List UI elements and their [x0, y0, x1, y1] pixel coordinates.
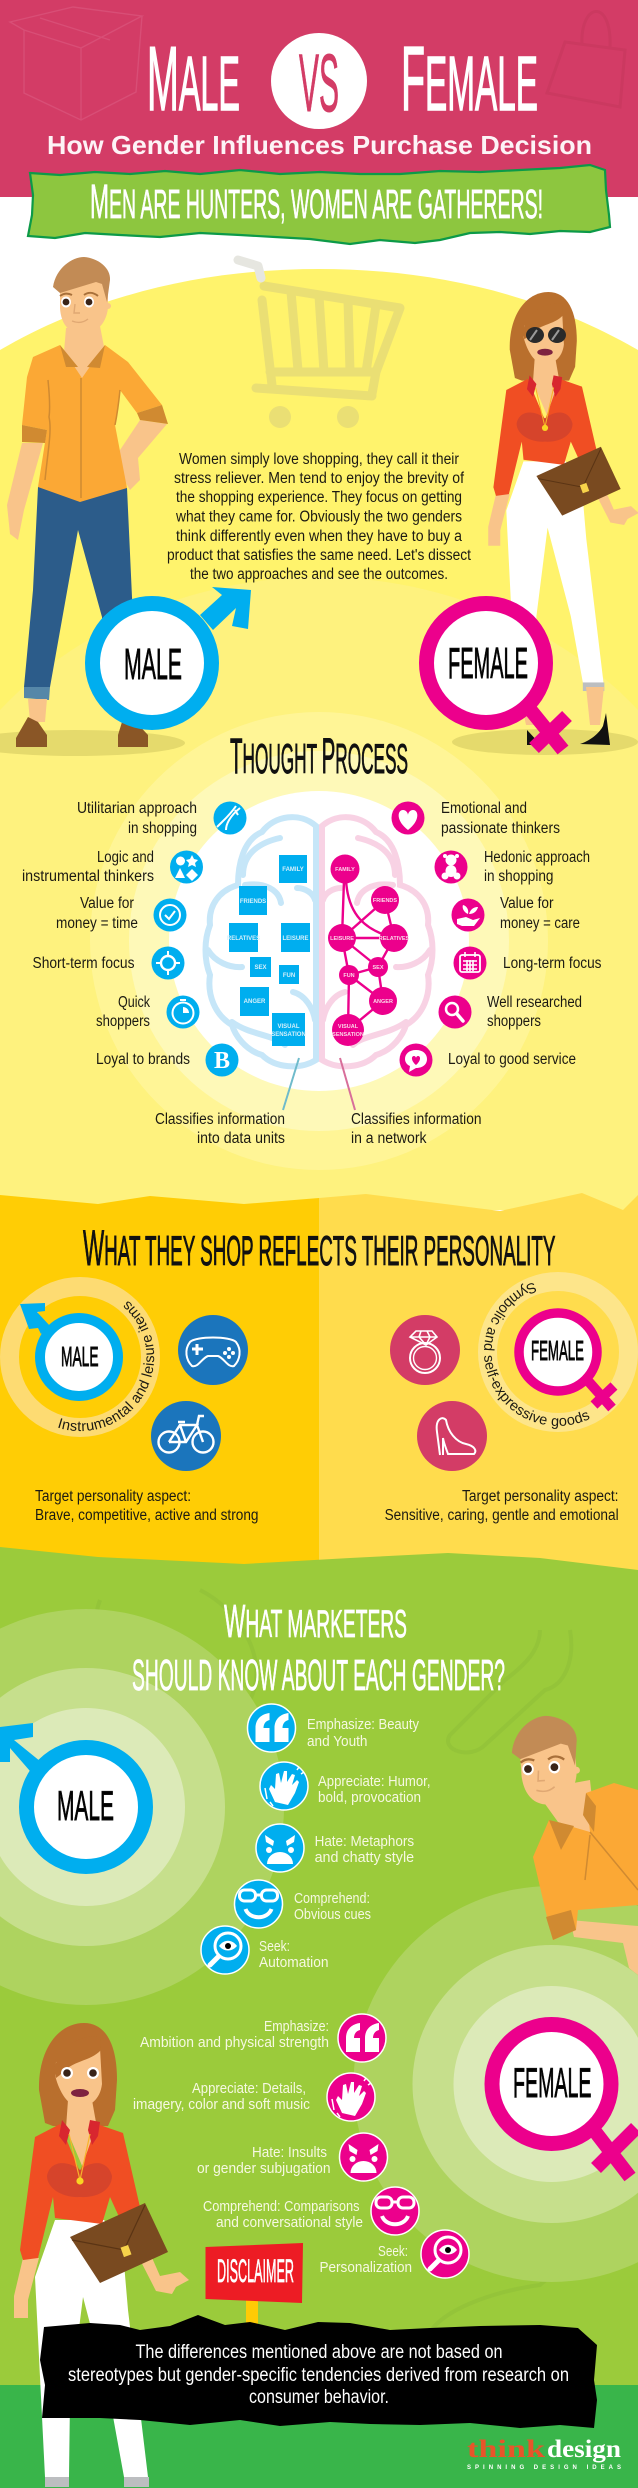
icon: bicycle — [151, 1401, 221, 1471]
tip: hate: Hate: Metaphors — [315, 1833, 414, 1850]
text block: intro paragraph: what they came for. Obviously the two genders — [175, 508, 462, 526]
panel: male concentric circles — [0, 1609, 284, 2005]
labels: male thinking traits: Short-term focus — [32, 955, 135, 972]
icon: male symbol large — [0, 1723, 146, 1866]
brain: right half outline — [322, 817, 432, 1066]
banner: disclaimer text — [40, 2315, 597, 2428]
data unit boxes: FAMILY — [282, 867, 304, 873]
text block: intro paragraph: the shopping experience. They focus on getting — [176, 489, 462, 506]
tip: seek — [320, 2230, 469, 2278]
diagram: brain — [206, 817, 432, 1110]
text block: intro paragraph — [167, 451, 472, 583]
tip: appreciate: Appreciate: Details, — [192, 2080, 306, 2097]
panel: header — [0, 0, 638, 197]
data unit boxes: RELATIVES — [227, 936, 260, 942]
panel: female shopping — [385, 1272, 638, 1524]
labels: female thinking traits: in a network — [351, 1130, 427, 1147]
labels: female thinking traits: shoppers — [487, 1013, 541, 1030]
icon: speech heart — [400, 1044, 432, 1076]
labels: female thinking traits: Emotional and — [441, 800, 527, 817]
tip: comprehend — [234, 1880, 371, 1928]
icon: female symbol large — [492, 2024, 636, 2177]
tip: seek: Personalization — [320, 2259, 412, 2276]
icon: shapes — [170, 850, 203, 884]
labels: male thinking traits: Classifies information — [155, 1111, 285, 1128]
network nodes: ANGER — [373, 999, 393, 1005]
banner: disclaimer text: stereotypes but gender-specific tendencies derived from research on — [68, 2365, 569, 2386]
text: male personality target: Target personality aspect: — [35, 1488, 191, 1505]
curved text: instrumental and leisure items: Instrumental and leisure items — [58, 1302, 154, 1432]
sign: disclaimer — [206, 2243, 303, 2334]
text block: intro paragraph: product that satisfies the same need. Let's dissect — [167, 547, 472, 564]
title: VS — [299, 38, 339, 129]
tip: comprehend — [203, 2187, 419, 2235]
lower ground — [0, 2385, 638, 2488]
tip: seek: Seek: — [378, 2243, 408, 2260]
tip: appreciate — [133, 2073, 375, 2121]
text: male personality target — [35, 1488, 258, 1524]
labels: female thinking traits: Value for — [500, 895, 554, 912]
network nodes: VISUAL — [338, 1024, 359, 1030]
subtitle: How Gender Influences Purchase Decision — [47, 130, 592, 160]
list: male marketing tips — [201, 1704, 430, 1974]
network nodes: SEX — [372, 965, 384, 971]
network nodes: FUN — [343, 973, 355, 979]
banner: disclaimer text: The differences mentioned above are not based on — [136, 2342, 502, 2363]
icon: teddy bear — [434, 850, 468, 884]
male symbol small — [20, 1303, 118, 1396]
labels: male thinking traits: Loyal to brands — [96, 1051, 190, 1068]
labels: male thinking traits: Utilitarian approach — [77, 800, 197, 817]
network nodes: FAMILY — [335, 867, 355, 873]
tip: hate: and chatty style — [315, 1849, 414, 1866]
icon: female symbol with label: FEMALE — [448, 639, 528, 688]
text block: intro paragraph: stress reliever. Men tend to enjoy the brevity of — [174, 470, 465, 487]
title — [147, 29, 538, 130]
tip: comprehend: and conversational style — [216, 2214, 363, 2231]
icon: faint box — [10, 7, 142, 120]
icon: heart — [392, 802, 424, 834]
icon: male symbol with label: MALE — [124, 640, 182, 689]
text: male personality target: Brave, competitive, active and strong — [35, 1507, 258, 1524]
tip: seek — [201, 1926, 328, 1974]
icon: magnifier — [438, 996, 472, 1028]
tip: seek: Automation — [259, 1954, 328, 1971]
tip: seek: Seek: — [259, 1938, 290, 1955]
female halo ring — [488, 1282, 628, 1422]
icon: faint shopping bag — [547, 11, 625, 107]
heading: what marketers should know — [132, 1595, 505, 1700]
labels: male thinking traits: into data units — [197, 1130, 285, 1147]
heading: thought process: THOUGHT PROCESS — [230, 728, 408, 784]
network nodes: SENSATION — [332, 1032, 364, 1038]
icon: female symbol with label — [426, 604, 567, 750]
panel: marketers background — [0, 1547, 638, 2488]
labels: male thinking traits: shoppers — [96, 1013, 150, 1030]
labels: male thinking traits — [22, 800, 285, 1147]
tip: appreciate: bold, provocation — [318, 1789, 421, 1806]
network nodes: FRIENDS — [373, 898, 397, 904]
data unit boxes: LEISURE — [282, 936, 309, 942]
illustration: man — [0, 257, 185, 756]
labels: female thinking traits: Hedonic approach — [484, 849, 590, 866]
banner: disclaimer text: consumer behavior. — [249, 2387, 389, 2408]
labels: male thinking traits: Logic and — [97, 849, 154, 866]
icon: brand letter — [206, 1044, 238, 1076]
icon: male symbol with label — [92, 587, 251, 722]
labels: female thinking traits — [351, 800, 602, 1147]
data unit boxes: SENSATION — [271, 1032, 306, 1038]
network nodes — [328, 854, 410, 1046]
tip: emphasize: and Youth — [307, 1733, 368, 1750]
brain: left half outline — [206, 817, 316, 1066]
icon: high heel — [417, 1401, 487, 1471]
heading: what marketers should know: WHAT MARKETERS — [224, 1595, 407, 1647]
icon: brand letter: B — [214, 1048, 230, 1074]
title: MALE — [147, 29, 240, 130]
callout line: female — [340, 1058, 355, 1110]
text block: intro paragraph: think differently even when they have to buy a — [176, 528, 462, 545]
female symbol small — [519, 1313, 614, 1408]
icon: hand with plant — [452, 898, 484, 932]
sunglasses — [526, 327, 566, 343]
illustration: woman with bag — [14, 2023, 189, 2487]
logo: think design: design — [547, 2436, 621, 2463]
data unit boxes: VISUAL — [277, 1024, 300, 1030]
text: female personality target: Target personality aspect: — [462, 1488, 618, 1505]
tip: emphasize — [140, 2014, 386, 2062]
banner: men are hunters — [28, 165, 610, 244]
labels: female thinking traits: Classifies information — [351, 1111, 482, 1128]
icon: target — [152, 946, 184, 980]
logo: think design: think — [467, 2436, 545, 2463]
panel: female concentric circles — [354, 1886, 638, 2282]
labels: male thinking traits: in shopping — [128, 820, 197, 837]
tip: appreciate — [260, 1762, 430, 1810]
network nodes: LEISURE — [330, 936, 354, 942]
network nodes: RELATIVES — [379, 936, 410, 942]
tip: hate: Hate: Insults — [252, 2144, 327, 2161]
text block: intro paragraph: the two approaches and see the outcomes. — [190, 566, 448, 583]
labels: female thinking traits: Well researched — [487, 994, 582, 1011]
tip: appreciate: Appreciate: Humor, — [318, 1773, 430, 1790]
panel: what they shop background — [0, 1193, 638, 1570]
icon: male symbol large: MALE — [57, 1782, 114, 1829]
illustration: woman with sunglasses — [452, 292, 638, 755]
data unit boxes: FUN — [283, 973, 295, 979]
icons: male traits — [152, 802, 246, 1076]
panel: yellow intro and thought process background — [0, 269, 638, 1210]
illustration: man leaning — [509, 1714, 638, 1975]
tip: hate — [256, 1824, 414, 1872]
icon: calendar — [454, 946, 486, 980]
logo: think design: SPINNING DESIGN IDEAS — [467, 2465, 621, 2471]
callout line: male — [283, 1058, 299, 1110]
tip: emphasize: Emphasize: — [264, 2018, 329, 2035]
labels: female thinking traits: Loyal to good service — [448, 1051, 576, 1068]
tip: emphasize — [248, 1704, 419, 1752]
tip: hate: or gender subjugation — [197, 2160, 330, 2177]
icon: ring — [390, 1315, 460, 1385]
tip: comprehend: Obvious cues — [294, 1906, 371, 1923]
male symbol small: MALE — [61, 1341, 98, 1372]
tip: emphasize: Emphasize: Beauty — [307, 1716, 419, 1733]
data unit boxes — [227, 855, 310, 1046]
male halo ring — [10, 1286, 150, 1428]
icon: game controller — [178, 1315, 248, 1385]
curved text: symbolic and self-expressive goods: Symbolic and self-expressive goods — [484, 1283, 590, 1429]
labels: female thinking traits: money = care — [500, 915, 580, 932]
labels: female thinking traits: passionate thinkers — [441, 820, 560, 837]
text block: intro paragraph: Women simply love shopping, they call it their — [179, 451, 459, 468]
icon: clock — [154, 898, 186, 932]
icons: female traits — [392, 802, 486, 1076]
labels: male thinking traits: Value for — [80, 895, 134, 912]
logo: think design — [467, 2436, 621, 2471]
labels: male thinking traits: money = time — [56, 915, 138, 932]
icon: stopwatch — [166, 996, 200, 1028]
text: DISCLAIMER — [217, 2253, 294, 2289]
tip: comprehend: Comprehend: Comparisons — [203, 2198, 360, 2215]
list: female marketing tips — [133, 2014, 469, 2278]
data unit boxes: FRIENDS — [240, 899, 266, 905]
data unit boxes: SEX — [254, 965, 267, 971]
labels: male thinking traits: Quick — [118, 994, 150, 1011]
labels: female thinking traits: Long-term focus — [503, 955, 602, 972]
labels: female thinking traits: in shopping — [484, 868, 554, 885]
tip: emphasize: Ambition and physical strength — [140, 2034, 329, 2051]
tip: comprehend: Comprehend: — [294, 1890, 370, 1907]
tip: hate — [197, 2133, 388, 2181]
tip: appreciate: imagery, color and soft music — [133, 2096, 310, 2113]
icon: faint shopping cart — [238, 260, 400, 428]
labels: male thinking traits: instrumental thinkers — [22, 868, 154, 885]
decorative faint tools — [96, 1590, 585, 2345]
icon: pliers — [214, 802, 246, 834]
data unit boxes: ANGER — [244, 999, 266, 1005]
text: female personality target — [385, 1488, 619, 1524]
panel: male shopping — [0, 1277, 258, 1524]
